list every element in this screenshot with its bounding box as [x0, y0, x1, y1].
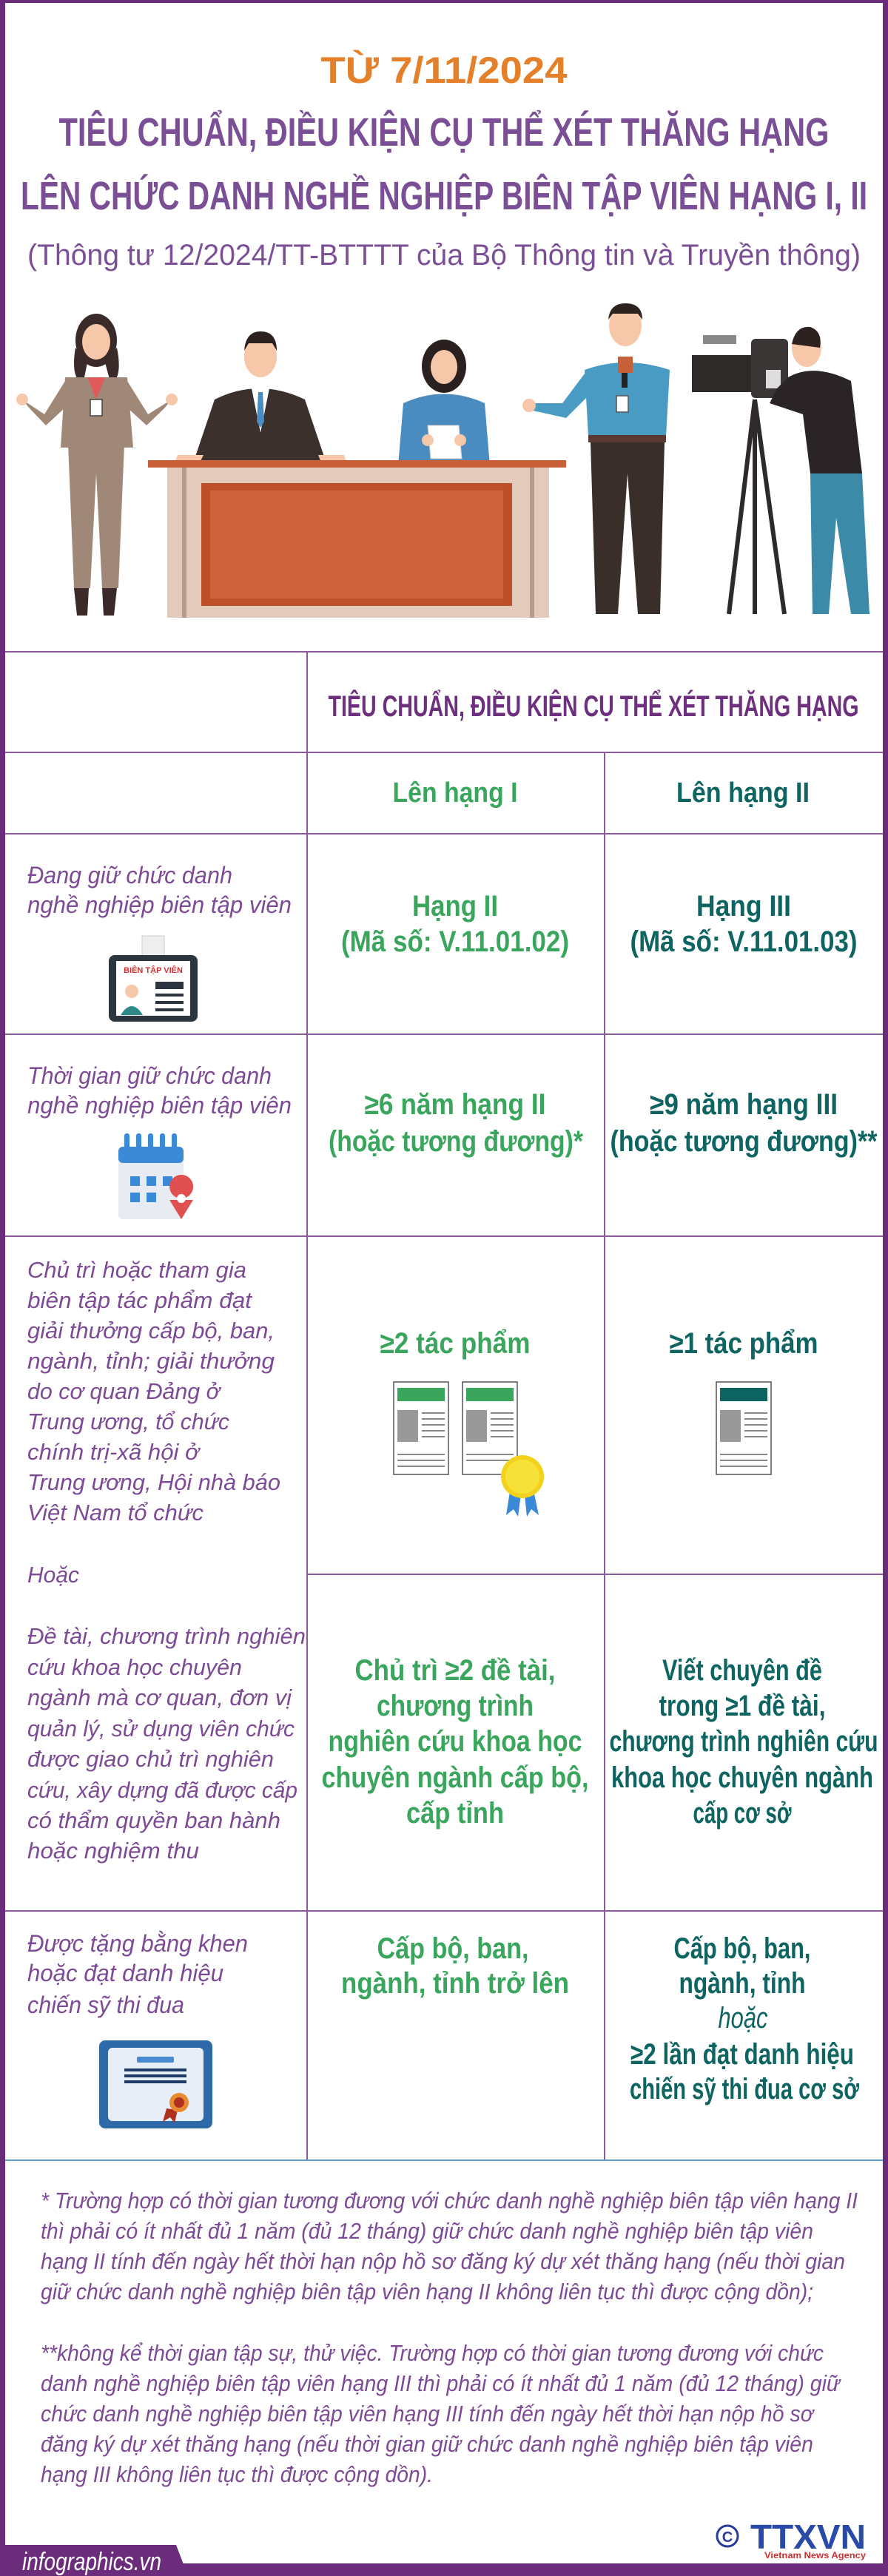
logo: TTXVN: C: [722, 2529, 733, 2546]
row 1 values: hạng II: [341, 890, 569, 958]
table grid: [5, 652, 883, 2160]
row 5 value col 3: ngành, tỉnh: [679, 1967, 805, 2000]
man at desk: [175, 331, 346, 462]
row 4 value col 2: [321, 1654, 589, 1830]
row 2 label: Thời gian giữ chức danh: [27, 1062, 272, 1089]
row 3 label: Đề tài, chương trình nghiên: [27, 1623, 306, 1649]
footnote 1: [41, 2188, 858, 2304]
row 3 label: [27, 1257, 306, 1864]
row 3 label: Trung ương, Hội nhà báo: [27, 1469, 280, 1495]
row 5 value col 3: Cấp bộ, ban,: [673, 1932, 811, 1965]
row 4 value col 3: trong ≥1 đề tài,: [659, 1690, 826, 1722]
row 3 value col 2: ≥2 tác phẩm: [380, 1327, 530, 1360]
row 3 label: chính trị-xã hội ở: [27, 1439, 201, 1465]
row 1 values: hạng II: Hạng II: [412, 890, 498, 923]
row 3 label: ngành, tỉnh; giải thưởng: [27, 1348, 275, 1374]
row 2 values col 3: [610, 1088, 878, 1158]
icon: one document: [716, 1382, 771, 1474]
footnote 1: thì phải có ít nhất đủ 1 năm (đủ 12 tháng) giữ chức danh nghề nghiệp biên tập viên: [41, 2218, 813, 2244]
row 3 label: Việt Nam tổ chức: [27, 1500, 204, 1525]
row 2 values col 2: [329, 1088, 583, 1158]
woman standing left: [16, 314, 178, 616]
row 4 value col 2: chuyên ngành cấp bộ,: [321, 1761, 589, 1794]
row 3 label: hoặc nghiệm thu: [27, 1838, 199, 1864]
title: [21, 109, 867, 218]
footnote 2: [41, 2340, 841, 2487]
row 3 label: do cơ quan Đảng ở: [27, 1378, 221, 1404]
row 3 label: được giao chủ trì nghiên: [27, 1746, 274, 1772]
row 5 value col 3: hoặc: [718, 2002, 768, 2034]
row 2 values col 2: ≥6 năm hạng II: [364, 1088, 546, 1121]
row 2 values col 3: ≥9 năm hạng III: [650, 1088, 838, 1121]
desk: [148, 460, 566, 618]
footnote 2: danh nghề nghiệp biên tập viên hạng III thì phải có ít nhất đủ 1 năm (đủ 12 tháng) giữ: [41, 2370, 841, 2396]
row 3 label: cứu khoa học chuyên: [27, 1654, 242, 1680]
row 5 label: Được tặng bằng khen: [27, 1930, 248, 1957]
icon: ID card: [109, 936, 198, 1022]
row 1 label: nghề nghiệp biên tập viên: [27, 891, 292, 918]
row 5 value col 2: Cấp bộ, ban,: [377, 1932, 528, 1965]
icon: calendar: [118, 1133, 193, 1219]
row 3 label: ngành mà cơ quan, đơn vị: [27, 1685, 292, 1710]
footnote 2: hạng III không liên tục thì được cộng dồn).: [41, 2461, 433, 2487]
logo: TTXVN: TTXVN: [750, 2518, 866, 2556]
footnote 2: chức danh nghề nghiệp biên tập viên hạng III tính đến ngày hết thời hạn nộp hồ sơ: [41, 2401, 815, 2427]
row 3 label: giải thưởng cấp bộ, ban,: [27, 1318, 275, 1343]
icon: certificate: [99, 2040, 212, 2128]
row 3 label: Hoặc: [27, 1562, 79, 1588]
row 4 value col 2: cấp tỉnh: [406, 1797, 504, 1830]
row 4 value col 3: [610, 1654, 878, 1830]
date heading: TỪ 7/11/2024: [321, 50, 568, 91]
reporter: [522, 303, 670, 614]
column heading: Lên hạng I: Lên hạng I: [392, 778, 518, 809]
row 1 label: Đang giữ chức danh: [27, 862, 232, 889]
row 2 values col 2: (hoặc tương đương)*: [329, 1125, 583, 1158]
row 1 label: [27, 862, 292, 918]
row 5 label: hoặc đạt danh hiệu: [27, 1960, 223, 1986]
woman at desk: [398, 340, 490, 466]
row 2 label: [27, 1062, 292, 1119]
row 4 value col 3: Viết chuyên đề: [662, 1654, 822, 1687]
row 3 label: có thẩm quyền ban hành: [27, 1807, 280, 1833]
subtitle: (Thông tư 12/2024/TT-BTTTT của Bộ Thông tin và Truyền thông): [27, 239, 861, 272]
row 3 label: biên tập tác phẩm đạt: [27, 1287, 252, 1313]
row 1 values: hạng II: (Mã số: V.11.01.02): [341, 925, 569, 958]
icon: two award documents: [394, 1382, 544, 1517]
row 5 value col 2: ngành, tỉnh trở lên: [341, 1967, 569, 2000]
row 5 value col 2: [341, 1932, 569, 2000]
row 5 label: [27, 1930, 248, 2018]
row 2 label: nghề nghiệp biên tập viên: [27, 1092, 292, 1119]
row 1 values: hạng III: [630, 890, 857, 958]
row 4 value col 2: chương trình: [377, 1690, 534, 1722]
footnote 1: giữ chức danh nghề nghiệp biên tập viên hạng II không liên tục thì được cộng dồn);: [41, 2279, 813, 2304]
row 4 value col 2: nghiên cứu khoa học: [329, 1725, 582, 1758]
row 4 value col 3: cấp cơ sở: [693, 1797, 792, 1830]
logo: TTXVN: [717, 2518, 866, 2560]
row 4 value col 2: Chủ trì ≥2 đề tài,: [355, 1654, 555, 1687]
row 3 label: quản lý, sử dụng viên chức: [27, 1716, 295, 1742]
footnote 2: **không kể thời gian tập sự, thử việc. Trường hợp có thời gian tương đương với chức: [41, 2340, 824, 2366]
footer tab: infographics.vn: infographics.vn: [22, 2548, 161, 2576]
row 5 label: chiến sỹ thi đua: [27, 1992, 184, 2018]
icon: ID card: BIÊN TẬP VIÊN: [124, 965, 183, 975]
row 3 label: Trung ương, tổ chức: [27, 1409, 229, 1434]
row 3 label: cứu, xây dựng đã được cấp: [27, 1777, 297, 1803]
logo: TTXVN: Vietnam News Agency: [764, 2550, 866, 2560]
row 1 values: hạng III: (Mã số: V.11.01.03): [630, 925, 857, 958]
illustration: newsroom: [16, 303, 870, 618]
row 1 values: hạng III: Hạng III: [696, 890, 791, 923]
cameraman: [692, 327, 870, 614]
row 3 label: Chủ trì hoặc tham gia: [27, 1257, 246, 1283]
row 5 value col 3: [630, 1932, 859, 2105]
footnote 2: đăng ký dự xét thăng hạng (nếu thời gian giữ chức danh nghề nghiệp biên tập viên: [41, 2431, 813, 2457]
row 3 value col 3: ≥1 tác phẩm: [669, 1327, 818, 1360]
column heading: Lên hạng II: Lên hạng II: [676, 778, 810, 809]
